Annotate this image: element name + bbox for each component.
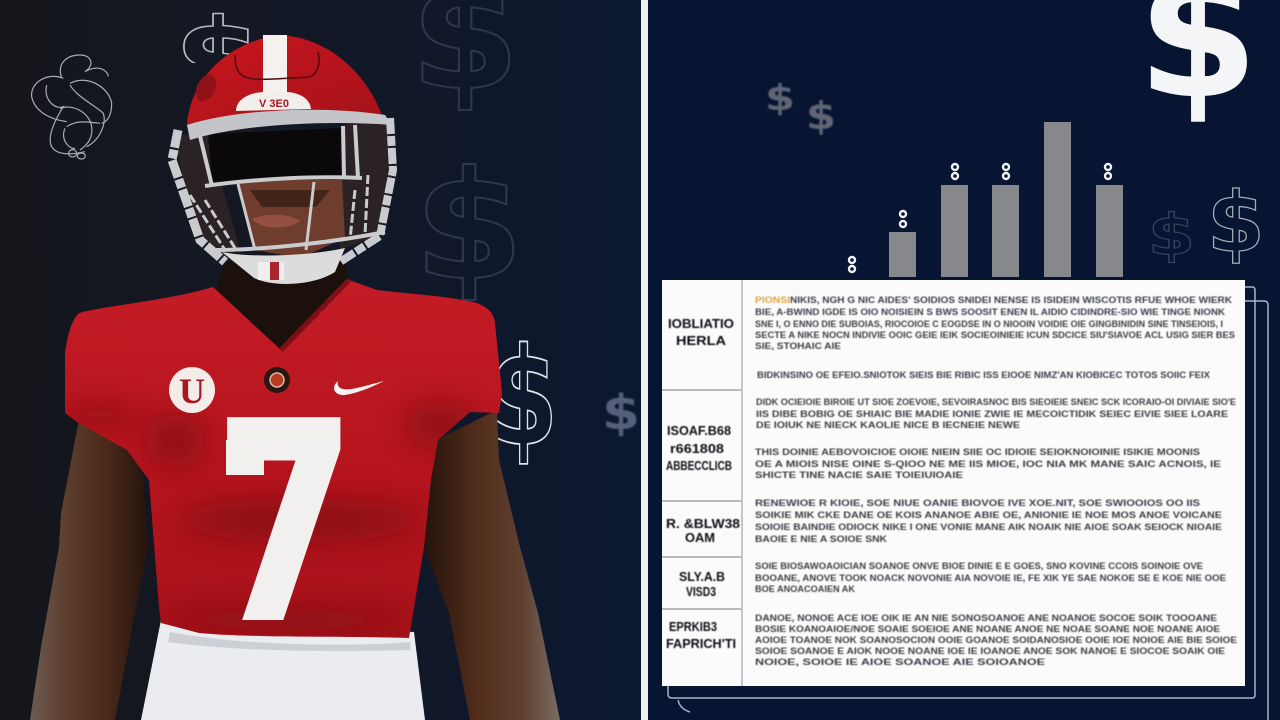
- table row text: NIKIS, NGH G NIC AIDES' SOIDIOS SNIDEI NENSE IS ISIDEIN WISCOTIS RFUE WHOE WIERK: [790, 295, 1232, 306]
- icon: small gray dollar one: $: [765, 78, 795, 119]
- left arm: [30, 420, 148, 720]
- table row text: PIONSI: [755, 295, 790, 306]
- table row labels: r661808: [670, 441, 724, 456]
- icon: dim outlined dollar: $: [1148, 203, 1195, 268]
- icon: outlined dollar middle: $: [414, 140, 524, 314]
- table row text: NOIOE, SOIOE IE AIOE SOANOE AIE SOIOANOE: [755, 657, 1045, 668]
- sleeve logo: U: [179, 371, 205, 411]
- table row text: BOE ANOACOAIEN AK: [755, 584, 855, 595]
- jersey shading: [60, 403, 474, 632]
- table row text: SOIOIE BAINDIE ODIOCK NIKE I ONE VONIE MANE AIK NOAIK NIE AIOE SOAK SEIOCK NIOAIE: [755, 522, 1222, 533]
- table row text: SOIKIE MIK CKE DANE OE KOIS ANANOE ABIE OE, ANIONIE IE NOE MOS ANOE VOICANE: [755, 510, 1222, 521]
- shorts: [141, 620, 425, 720]
- face mask frame: [172, 118, 393, 262]
- table row text: AOIOE TOANOE NOK SOANOSOCION OOIE GOANOE SOIDANOSIOE OOIE IOE NOIOE AIE BIE SOIOE: [755, 635, 1237, 646]
- jersey collar: [281, 280, 349, 350]
- table row labels: FAPRICH'TI: [666, 636, 736, 651]
- face: [236, 180, 345, 258]
- icon: outlined dollar: $: [1207, 174, 1265, 271]
- table row labels: OAM: [685, 530, 715, 545]
- icon: scribble emblem: [32, 55, 112, 159]
- icon: outlined dollar beside arm: $: [489, 319, 558, 476]
- table row text: [755, 295, 1237, 668]
- chin guard: [222, 248, 345, 284]
- helmet shell: [187, 35, 382, 125]
- table row labels: ABBECCLICB: [666, 458, 732, 473]
- table row text: SECTE A NIKE NOCN INDIVIE OOIC GEIE IEIK SOCIEOINIEIE ICUN SDCICE SIU'SIAVOE ACL USIG SIER BES: [755, 330, 1235, 341]
- table row text: DANOE, NONOE ACE IOE OIK IE AN NIE SONOSOANOE ANE NOANOE SOCOE SOIK TOOOANE: [755, 613, 1217, 624]
- table row text: SHICTE TINE NACIE SAIE TOIEIUIOAIE: [755, 470, 963, 481]
- table row labels: EPRKIB3: [669, 619, 717, 634]
- brow bar: [187, 110, 392, 140]
- table row text: SOIOE SOANOE E AIOK NOOE NOANE IOE IE IOANOE ANOE SOK NANOE E SIOCOE SOAIK OIE: [755, 646, 1225, 657]
- table row labels: VISD3: [686, 584, 716, 599]
- jersey number 7: 7: [216, 366, 354, 681]
- player figure: [30, 35, 560, 720]
- jersey: [65, 280, 502, 638]
- table row text: IIS DIBE BOBIG OE SHIAIC BIE MADIE IONIE ZWIE IE MECOICTIDIK SEIEC EIVIE SIEE LOARE: [756, 409, 1228, 420]
- helmet front badge: V 3E0: [259, 98, 289, 110]
- table row text: DIDK OCIEIOIE BIROIE UT SIOE ZOEVOIE, SEVOIRASNOC BIS SIEOIEIE SNEIC SCK ICORAIO-OI DIVIAIE SIO'E: [756, 397, 1236, 408]
- collar emblem: [264, 367, 290, 393]
- table row text: SIE, STOHAIC AIE: [755, 341, 841, 352]
- stacked frame lines behind table: [668, 287, 1268, 720]
- sleeve logo: [169, 367, 215, 413]
- table row text: RENEWIOE R KIOIE, SOE NIUE OANIE BIOVOE IVE XOE.NIT, SOE SWIOOIOS OO IIS: [755, 498, 1200, 509]
- table row labels: [666, 316, 740, 651]
- table row text: DE IOIUK NE NIECK KAOLIE NICE B IECNEIE NEWE: [756, 420, 1020, 431]
- table row text: OE A MIOIS NISE OINE S-QIOO NE ME IIS MIOE, IOC NIA MK MANE SAIC ACNOIS, IE: [755, 459, 1221, 470]
- shorts hem shadow: [168, 632, 411, 651]
- table row labels: HERLA: [676, 333, 727, 348]
- neck: [213, 262, 352, 358]
- icon: small gray dollar two: $: [806, 94, 836, 138]
- panel: right finance side: [648, 0, 1280, 720]
- icon: small blurred dollar: $: [602, 385, 640, 441]
- helmet stripe: [263, 35, 287, 93]
- table row text: BOOANE, ANOVE TOOK NOACK NOVONIE AIA NOVOIE IE, FE XIK YE SAE NOKOE SE E KOE NIE OOE: [755, 573, 1226, 584]
- divider between panels: [641, 0, 648, 720]
- visor: [208, 128, 342, 182]
- table row text: SOIE BIOSAWOAOICIAN SOANOE ONVE BIOE DINIE E E GOES, SNO KOVINE CCOIS SOINOIE OVE: [755, 561, 1203, 572]
- table row labels: IOBLIATIO: [668, 316, 734, 331]
- cage side fill: [174, 120, 393, 258]
- table row text: THIS DOINIE AEBOVOICIOE OIOIE NIEIN SIIE OC IDIOIE SEIOKNOIOINIE ISIKIE MOONIS: [755, 447, 1200, 458]
- helmet side decal: [192, 72, 220, 104]
- data table: [662, 280, 1245, 686]
- table row text: BAOIE E NIE A SOIOE SNK: [755, 534, 887, 545]
- table row labels: ISOAF.B68: [667, 423, 731, 438]
- panel: left player side: [0, 0, 641, 720]
- table row text: BIDKINSINO OE EFEIO.SNIOTOK SIEIS BIE RIBIC ISS EIOOE NIMZ'AN KIOBICEC TOTOS SOIIC FEIX: [757, 370, 1211, 381]
- helmet: [172, 35, 393, 284]
- helmet decal line: [235, 52, 319, 79]
- right arm: [424, 410, 560, 720]
- table row text: BOSIE KOANOAIOE/NOE SOAIE SOEIOE ANE NOANE ANOE NE NOAE SOANE NOE NOANE AIOE: [755, 624, 1220, 635]
- table row labels: SLY.A.B: [679, 569, 725, 584]
- bar value markers: [849, 164, 1111, 272]
- table row text: SNE I, O ENNO DIE SUBOIAS, RIOCOIOE C EOGDSE IN O NIOOIN VOIDIE OIE GINGBINIDIN SINE TINSEIOIS, I: [755, 319, 1223, 330]
- helmet front badge: [236, 92, 311, 111]
- icon: jersey swoosh: [334, 381, 384, 395]
- table row labels: R. &BLW38: [666, 516, 740, 531]
- bar chart: [849, 122, 1123, 277]
- table row text: BIE, A-BWIND IGDE IS OIO NOISIEIN S BWS SOOSIT ENEN IL AIDIO CIDINDRE-SIO WIE TINGE NIONK: [755, 307, 1225, 318]
